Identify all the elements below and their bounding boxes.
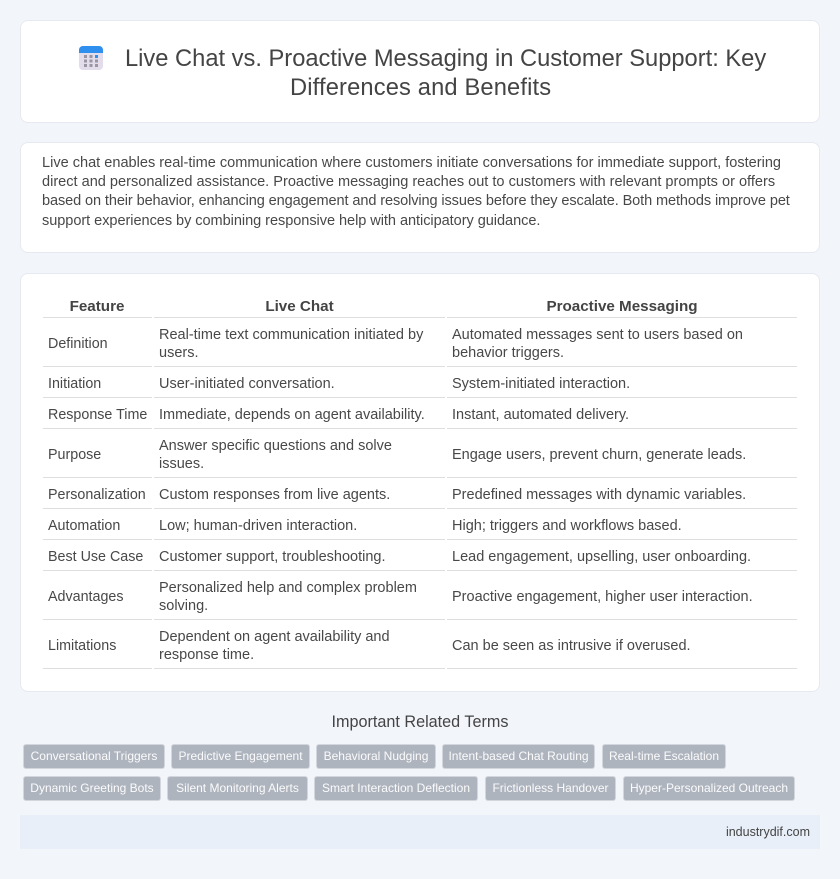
- footer bar: [20, 815, 820, 849]
- title: [125, 46, 766, 101]
- related terms heading: Important Related Terms: [332, 713, 508, 731]
- table header: [70, 298, 698, 315]
- related terms tags: Real-time Escalation: [609, 749, 719, 763]
- row: Definition: [48, 327, 743, 361]
- row: Initiation: System-initiated interaction.: [452, 376, 630, 392]
- row: Definition: Real-time text communication initiated by: [159, 327, 423, 343]
- row: Best Use Case: Best Use Case: [48, 549, 143, 565]
- row: Limitations: response time.: [159, 647, 254, 663]
- related terms tags: Silent Monitoring Alerts: [176, 781, 299, 795]
- row: Initiation: [48, 376, 630, 392]
- row: Automation: [48, 518, 682, 534]
- intro text panel: [20, 142, 820, 253]
- intro paragraph: based on their behavior, enhancing engagement and resolving issues before they escalate. Both methods improve pet: [42, 193, 790, 209]
- row: Response Time: Immediate, depends on agent availability.: [159, 407, 425, 423]
- row: Definition: Automated messages sent to users based on: [452, 327, 743, 343]
- title: Live Chat vs. Proactive Messaging in Customer Support: Key: [125, 46, 766, 72]
- related terms tags: Intent-based Chat Routing: [448, 749, 589, 763]
- row: Purpose: Purpose: [48, 447, 101, 463]
- row: Purpose: Answer specific questions and solve: [159, 438, 392, 454]
- row: Limitations: Dependent on agent availability and: [159, 629, 390, 645]
- row: Best Use Case: Lead engagement, upselling, user onboarding.: [452, 549, 751, 565]
- comparison table panel: [20, 273, 820, 692]
- related terms tags: Smart Interaction Deflection: [322, 781, 470, 795]
- row: Personalization: [48, 487, 746, 503]
- row: Definition: Definition: [48, 336, 108, 352]
- row: Automation: High; triggers and workflows based.: [452, 518, 682, 534]
- table header: Live Chat: [265, 298, 334, 315]
- table header: Proactive Messaging: [546, 298, 698, 315]
- row: Advantages: Advantages: [48, 589, 124, 605]
- row: Limitations: [48, 629, 691, 663]
- related terms tags: Frictionless Handover: [492, 781, 609, 795]
- intro paragraph: [42, 155, 790, 229]
- row: Response Time: [48, 407, 629, 423]
- row: Definition: users.: [159, 345, 198, 361]
- row: Advantages: [48, 580, 753, 614]
- row: Best Use Case: Customer support, troubleshooting.: [159, 549, 386, 565]
- related terms tags: Hyper-Personalized Outreach: [630, 781, 788, 795]
- related terms tags: Behavioral Nudging: [324, 749, 428, 763]
- row: Automation: Automation: [48, 518, 120, 534]
- row: Automation: Low; human-driven interaction.: [159, 518, 357, 534]
- related terms tags: Predictive Engagement: [178, 749, 303, 763]
- title: Differences and Benefits: [290, 75, 551, 101]
- title card: [20, 20, 820, 123]
- table header: Feature: [70, 298, 124, 315]
- row: Response Time: Response Time: [48, 407, 147, 423]
- related terms tags: [23, 744, 795, 801]
- row: Best Use Case: [48, 549, 751, 565]
- row: Advantages: Proactive engagement, higher user interaction.: [452, 589, 753, 605]
- row: Personalization: Personalization: [48, 487, 146, 503]
- icon: calendar: [79, 46, 103, 70]
- row: Advantages: Personalized help and complex problem: [159, 580, 417, 596]
- related terms tags: Dynamic Greeting Bots: [30, 781, 154, 795]
- row: Limitations: Can be seen as intrusive if overused.: [452, 638, 691, 654]
- comparison table: [43, 298, 797, 669]
- row: Advantages: solving.: [159, 598, 208, 614]
- row: Purpose: [48, 438, 746, 472]
- intro paragraph: direct and personalized assistance. Proactive messaging reaches out to customers with relevant prompts or offers: [42, 174, 775, 190]
- row: Initiation: Initiation: [48, 376, 101, 392]
- intro paragraph: support experiences by combining responsive help with anticipatory guidance.: [42, 213, 540, 229]
- row: Purpose: Engage users, prevent churn, generate leads.: [452, 447, 746, 463]
- row: Purpose: issues.: [159, 456, 204, 472]
- related terms tags: Conversational Triggers: [31, 749, 157, 763]
- intro paragraph: Live chat enables real-time communication where customers initiate conversations for immediate support, fostering: [42, 155, 781, 171]
- row: Definition: behavior triggers.: [452, 345, 564, 361]
- row: Initiation: User-initiated conversation.: [159, 376, 335, 392]
- row: Response Time: Instant, automated delivery.: [452, 407, 629, 423]
- row: Personalization: Predefined messages with dynamic variables.: [452, 487, 746, 503]
- footer source: industrydif.com: [726, 825, 810, 839]
- row: Limitations: Limitations: [48, 638, 116, 654]
- row: Personalization: Custom responses from live agents.: [159, 487, 390, 503]
